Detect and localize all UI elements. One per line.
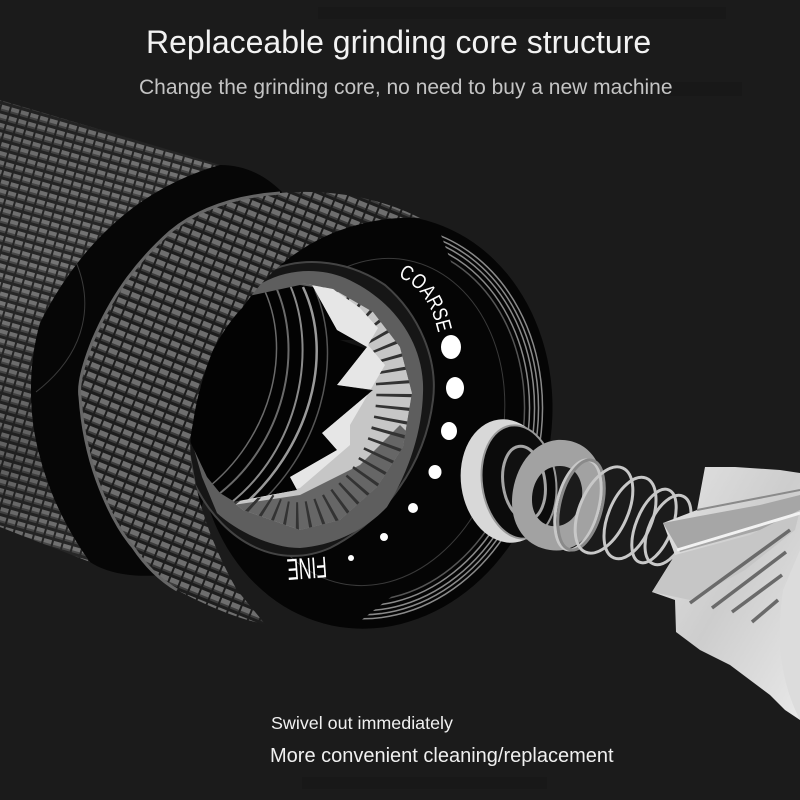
burr core [652,467,800,720]
label: COARSE: COARSE [401,266,452,332]
scale dots [348,335,464,561]
subtitle: Change the grinding core, no need to buy a new machine [139,76,673,99]
title: Replaceable grinding core structure [146,24,651,60]
chamber interior with threads [190,285,412,530]
faint ghost text band bottom [302,777,547,789]
grinder body [0,100,220,562]
black collar [31,165,282,592]
setting labels and scale dots [286,266,504,585]
caption line one: Swivel out immediately [271,713,453,733]
burr teeth [233,284,412,530]
illustration: coffee grinder with exploded core [0,100,800,720]
faint ghost text band top [318,7,742,96]
grinding chamber rim [180,262,434,556]
caption line two: More convenient cleaning/replacement [270,745,614,767]
label: FINE: FINE [286,550,328,585]
washer [512,440,603,551]
grinder face ring [210,218,552,629]
knurled adjustment ring [80,192,420,624]
bearing [453,413,564,549]
spring [546,455,700,572]
